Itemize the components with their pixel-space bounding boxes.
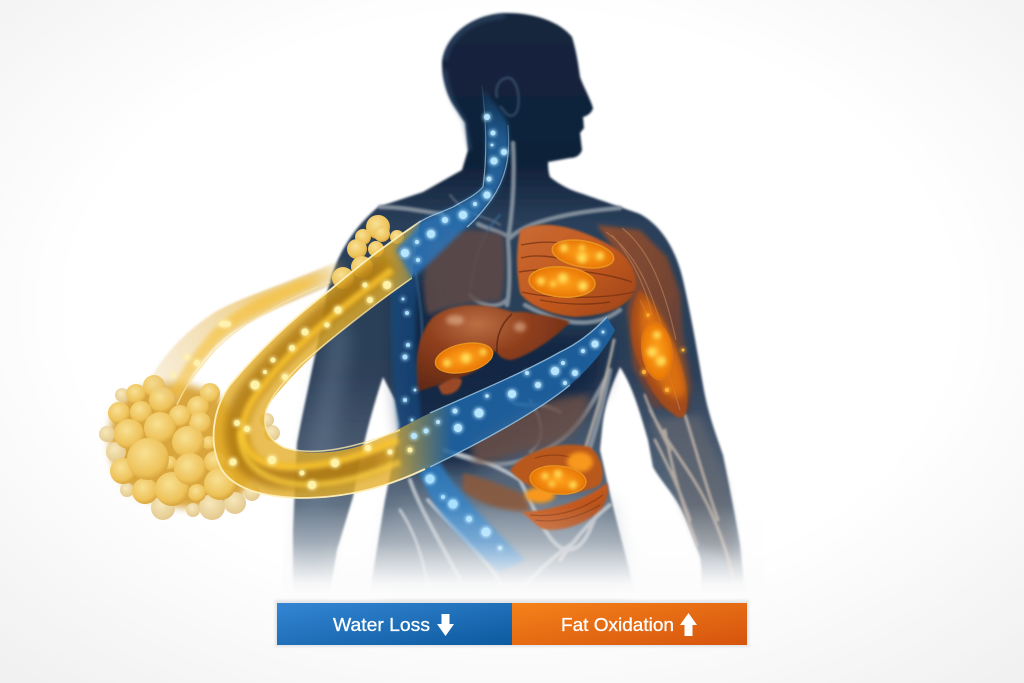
legend bar	[275, 600, 749, 647]
abdomen glow patches	[525, 452, 593, 503]
bottom fade of figure	[284, 505, 764, 598]
dark interior	[400, 280, 610, 470]
water loss segment	[277, 603, 512, 645]
lung tissue	[424, 230, 505, 315]
lower abdomen tissue	[463, 473, 530, 512]
left arm sheen	[300, 300, 350, 585]
deltoid and upper arm muscle	[597, 225, 693, 418]
liver highlight	[446, 315, 526, 332]
delt striations	[606, 228, 680, 410]
transport tube	[214, 221, 615, 498]
human silhouette	[293, 13, 745, 592]
fat cluster: shoulder deposit	[332, 215, 404, 289]
strand sparks	[171, 321, 231, 377]
fat cluster: main deposit	[99, 375, 280, 520]
liver	[416, 305, 570, 394]
forearm tint	[650, 415, 738, 560]
faint feather strands	[147, 258, 350, 405]
pectoral muscle	[517, 225, 636, 317]
arrow down	[437, 614, 454, 636]
blue vertical tube lower	[391, 280, 525, 572]
gold particles	[230, 281, 412, 489]
tube shine lines	[214, 221, 425, 498]
tube inner glow	[242, 270, 398, 467]
fat oxidation segment: Fat Oxidation	[561, 614, 674, 635]
fat oxidation segment	[512, 603, 747, 645]
back of head rim	[445, 16, 505, 150]
arm mitochondrion	[638, 295, 686, 399]
arrow up	[680, 613, 697, 636]
tube dark core	[236, 262, 398, 478]
intestines	[470, 395, 590, 465]
blue vertical tube dots	[402, 298, 502, 550]
blue particles lower	[411, 330, 604, 439]
mitochondrion: pec upper	[550, 236, 616, 272]
abdominal muscle	[510, 445, 608, 530]
liver lower lobe	[438, 378, 462, 394]
fat base mass	[110, 383, 252, 508]
vessels and sinews	[380, 143, 735, 590]
mitochondrion: abdomen	[529, 464, 587, 496]
torso lower haze	[380, 500, 630, 590]
blue tube upper	[396, 85, 509, 278]
ear	[496, 78, 519, 116]
mitochondrion: liver	[433, 338, 495, 378]
water loss segment: Water Loss	[333, 614, 430, 635]
mitochondrion: pec lower	[528, 265, 596, 299]
liver fissure	[497, 314, 512, 352]
biceps	[631, 290, 688, 418]
blue particles upper	[401, 114, 507, 262]
blue tube rims	[430, 317, 607, 467]
